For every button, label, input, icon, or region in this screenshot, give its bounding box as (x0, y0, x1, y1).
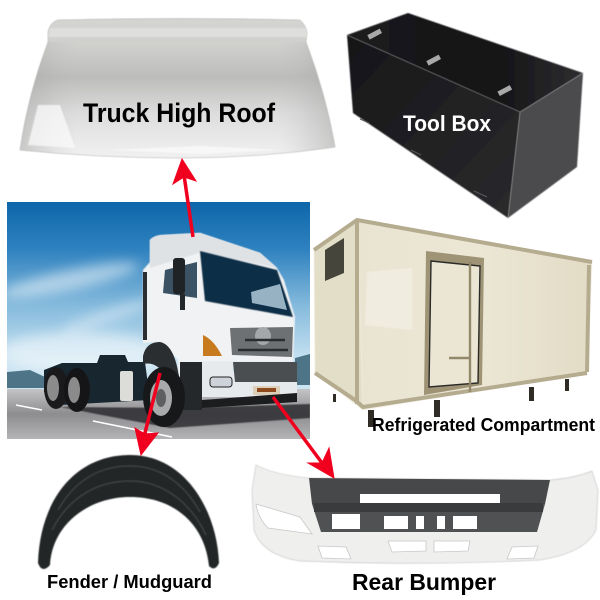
mirror (173, 258, 185, 294)
bumper shell (252, 465, 598, 563)
roof top band (48, 28, 307, 37)
grille openings (332, 514, 477, 529)
grille slot (360, 494, 500, 503)
box end (314, 220, 363, 410)
box front (347, 35, 520, 218)
fender ribs (52, 466, 206, 535)
turn light (203, 335, 222, 356)
windshield (200, 251, 293, 317)
door (429, 261, 480, 387)
road markings (16, 405, 172, 437)
box side (357, 220, 592, 410)
bumper (202, 362, 297, 397)
panel: truck photo (0, 202, 310, 439)
rear wheels (44, 367, 90, 412)
bumper lights (256, 504, 538, 559)
arrow: truck to bumper (273, 397, 334, 478)
roof shell (20, 18, 335, 158)
label: tool box: Tool Box (403, 111, 492, 136)
box top (347, 13, 583, 112)
roof reflections (28, 105, 280, 154)
grille bar (314, 503, 543, 512)
mountains (7, 354, 310, 388)
lower bumper (202, 393, 297, 408)
box lower marks (360, 119, 487, 197)
label: fender: Fender / Mudguard (47, 572, 212, 592)
rear cab edge (143, 272, 147, 340)
fog light (210, 377, 232, 387)
chassis (44, 355, 150, 405)
clouds (0, 256, 160, 372)
door frame (424, 251, 484, 395)
fuel tank (120, 371, 133, 401)
fender outer (38, 455, 219, 569)
wheel arch (143, 342, 179, 376)
arrow: truck to fender (135, 373, 160, 455)
cab body (143, 233, 295, 400)
label: refrigerated compartment: Refrigerated Compartment (372, 415, 595, 435)
front wheel (143, 367, 185, 427)
road (7, 389, 310, 439)
panel: refrigerated compartment (314, 220, 592, 427)
door hardware (449, 262, 470, 392)
sky (7, 202, 310, 392)
label: truck high roof: Truck High Roof (83, 98, 276, 128)
end window (325, 238, 344, 281)
panel: tool box (347, 13, 583, 218)
truck shadow (60, 404, 310, 428)
arrow: truck to roof (173, 159, 196, 237)
grille upper (309, 478, 550, 504)
grille lower (312, 504, 545, 532)
box latches (367, 29, 512, 96)
reflection (365, 268, 412, 330)
bumper plate (253, 386, 280, 395)
wheels (333, 379, 569, 427)
side window (163, 262, 197, 298)
panel: fender (38, 455, 219, 569)
cab roof shade (150, 233, 277, 268)
label: rear bumper: Rear Bumper (352, 569, 496, 595)
panel: truck high roof (20, 18, 335, 158)
aluminium trim (314, 220, 592, 407)
roof side shading (20, 42, 335, 158)
box side (508, 73, 583, 218)
grille (230, 327, 293, 357)
panel: rear bumper (252, 465, 598, 563)
